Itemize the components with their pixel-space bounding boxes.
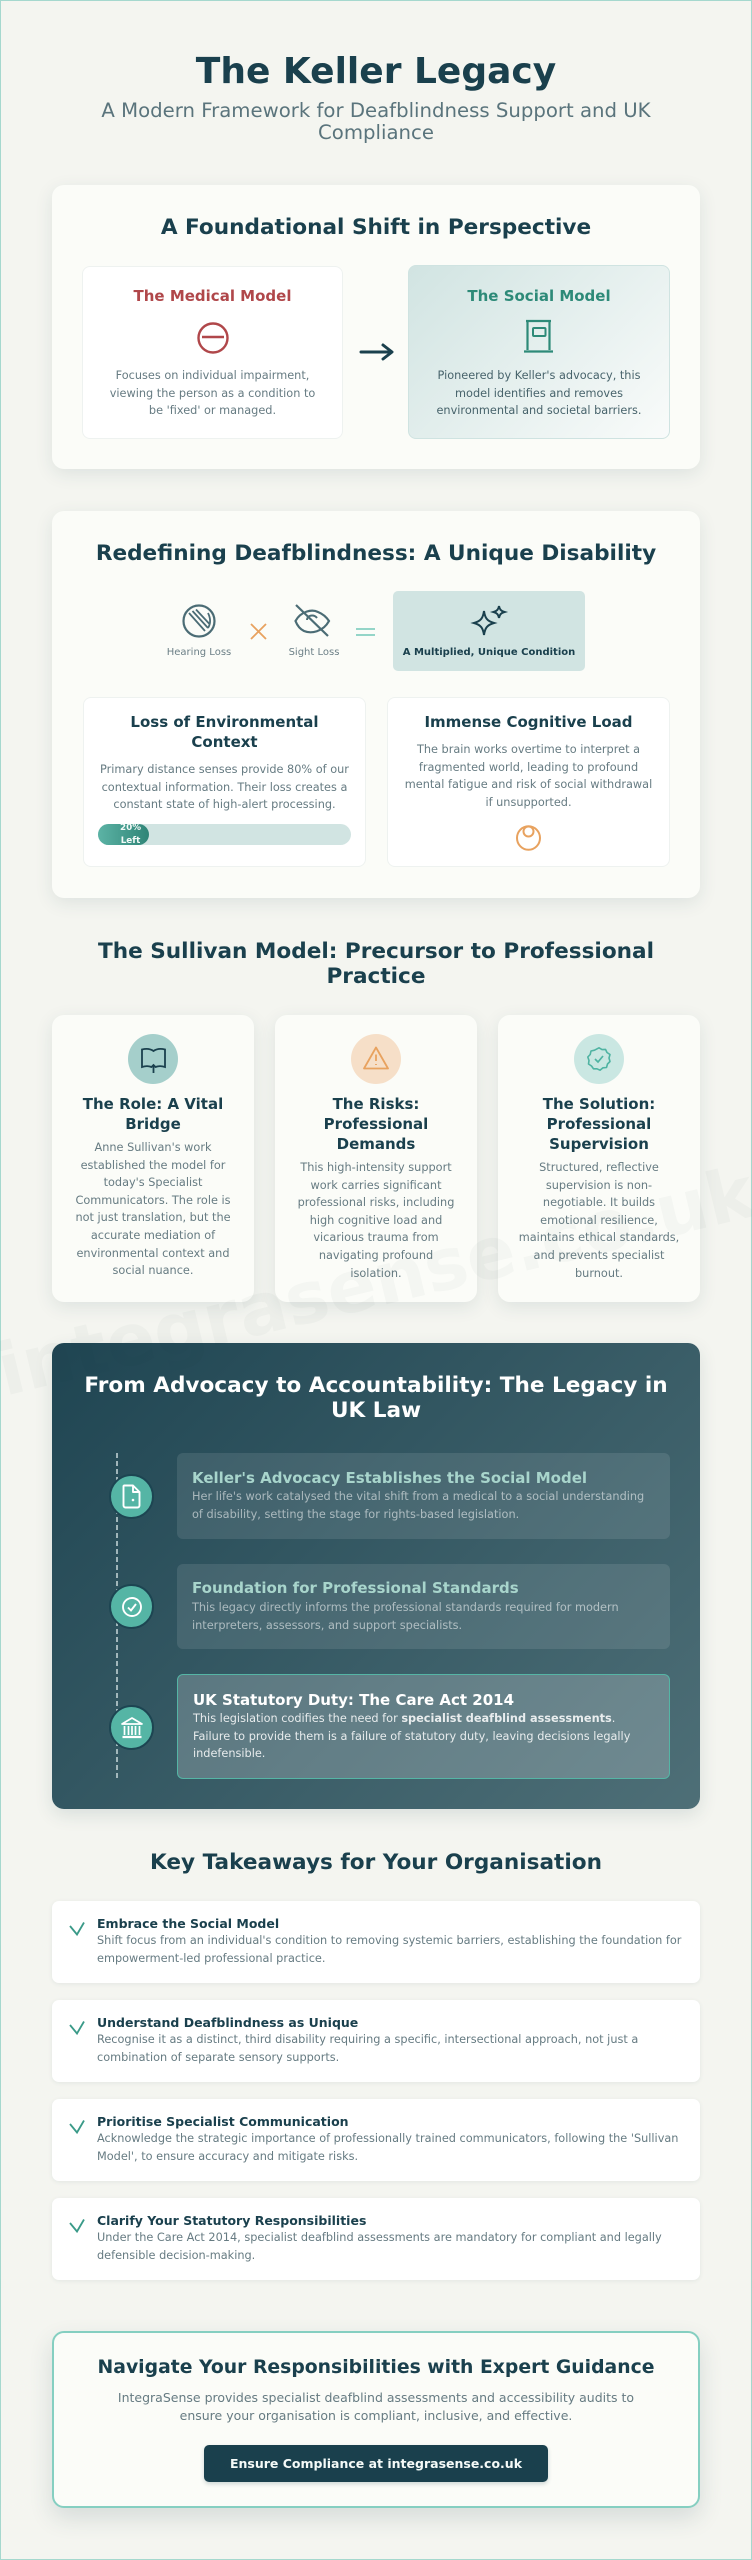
card heading — [324, 1095, 428, 1153]
icon: institution — [109, 1705, 154, 1750]
takeaway title: Prioritise Specialist Communication — [97, 2114, 349, 2129]
label: hearing loss: Hearing Loss — [167, 647, 231, 658]
panel: the solution — [498, 1015, 700, 1302]
icon: book — [128, 1034, 178, 1084]
takeaway text: combination of separate sensory supports. — [97, 2051, 339, 2064]
card: loss of environmental context — [83, 697, 366, 867]
card heading: Immense Cognitive Load — [424, 712, 633, 730]
panel: the role — [52, 1015, 254, 1302]
card text: vicarious trauma from — [313, 1231, 439, 1244]
step text: interpreters, assessors, and support specialists. — [192, 1619, 462, 1632]
icon: arrow — [360, 343, 394, 361]
cta text: IntegraSense provides specialist deafblind assessments and accessibility audits to — [118, 2390, 634, 2405]
heading: Redefining Deafblindness: A Unique Disability — [96, 540, 656, 566]
takeaway text — [97, 1934, 682, 1965]
heading — [84, 1372, 668, 1422]
card heading — [82, 1095, 223, 1133]
subtitle — [101, 98, 651, 144]
takeaway text — [97, 2229, 662, 2264]
card text — [100, 763, 349, 811]
takeaway text — [97, 2132, 678, 2163]
takeaway text — [97, 2033, 638, 2064]
cta button: Ensure Compliance at integrasense.co.uk — [230, 2456, 522, 2471]
card text: work carries significant — [310, 1179, 442, 1192]
medical model text: viewing the person as a condition to — [110, 387, 315, 400]
card text: if unsupported. — [485, 796, 572, 809]
takeaway 3 — [52, 2099, 700, 2181]
step text: Her life's work catalysed the vital shift from a medical to a social understanding — [192, 1490, 644, 1503]
card text: environmental context and — [76, 1247, 230, 1260]
card text: negotiable. It builds — [543, 1196, 655, 1209]
card heading: Professional — [547, 1115, 651, 1133]
icon: equals — [356, 628, 375, 636]
card text: professional risks, including — [298, 1196, 454, 1209]
icon: check — [69, 1922, 85, 1936]
step text: This legacy directly informs the professional standards required for modern — [192, 1601, 619, 1614]
takeaway text: Shift focus from an individual's condition to removing systemic barriers, establishing the foundation for — [97, 1934, 681, 1947]
social model text: environmental and societal barriers. — [436, 404, 642, 417]
timeline step 2 — [109, 1564, 670, 1649]
cta text — [54, 2389, 698, 2424]
takeaway 4 — [52, 2198, 700, 2280]
cta heading: Navigate Your Responsibilities with Expert Guidance — [98, 2357, 654, 2378]
icon: multiply — [250, 623, 267, 640]
card text: established the model for — [81, 1159, 225, 1172]
step text: This legislation codifies the need for specialist deafblind assessments. — [193, 1712, 615, 1725]
takeaway 1 — [52, 1901, 700, 1983]
heading: the sullivan model — [98, 938, 654, 988]
watermark: integrasense.co.uk — [0, 1150, 752, 1412]
card text: isolation. — [350, 1267, 402, 1280]
card text — [75, 1141, 231, 1277]
card: immense cognitive load — [387, 697, 670, 867]
card text — [298, 1161, 454, 1280]
takeaway text: empowerment-led professional practice. — [97, 1952, 325, 1965]
card text: emotional resilience, — [540, 1214, 658, 1227]
social model title: The Social Model — [467, 287, 611, 305]
takeaway text: Acknowledge the strategic importance of professionally trained communicators, following the 'Sullivan — [97, 2132, 678, 2145]
social model text — [436, 369, 642, 417]
icon: open door — [524, 320, 553, 353]
social model text: Pioneered by Keller's advocacy, this — [438, 369, 640, 382]
card text: maintains ethical standards, — [519, 1231, 679, 1244]
takeaway 2 — [52, 2000, 700, 2082]
panel: the risks — [275, 1015, 477, 1302]
card heading: The Solution: — [543, 1095, 655, 1113]
card: social model — [408, 265, 670, 439]
medical model text — [110, 369, 315, 417]
card heading: Supervision — [549, 1135, 649, 1153]
icon: no entry — [197, 322, 229, 354]
card text: contextual information. Their loss creates a — [102, 781, 347, 794]
medical model title: The Medical Model — [134, 287, 291, 305]
icon: check circle — [109, 1584, 154, 1629]
step box — [177, 1453, 670, 1539]
subtitle: Compliance — [318, 121, 434, 144]
step box — [177, 1564, 670, 1649]
result label: A Multiplied, Unique Condition — [403, 647, 575, 658]
step text — [192, 1601, 619, 1632]
step title: UK Statutory Duty: The Care Act 2014 — [193, 1691, 514, 1709]
takeaway text: Under the Care Act 2014, specialist deafblind assessments are mandatory for compliant and legally — [97, 2231, 662, 2244]
card text — [405, 743, 652, 809]
card text: Primary distance senses provide 80% of our — [100, 763, 349, 776]
card text: The brain works overtime to interpret a — [417, 743, 640, 756]
timeline step 3 — [109, 1674, 670, 1779]
panel: redefining deafblindness — [52, 511, 700, 898]
heading: A Foundational Shift in Perspective — [161, 214, 591, 240]
step text — [192, 1490, 644, 1521]
icon: hearing loss — [182, 604, 216, 638]
heading: From Advocacy to Accountability: The Legacy in — [84, 1372, 668, 1398]
icon: sight loss — [294, 604, 330, 637]
heading: UK Law — [331, 1398, 421, 1422]
takeaway title: Embrace the Social Model — [97, 1916, 279, 1931]
panel: a foundational shift — [52, 185, 700, 469]
medical model text: be 'fixed' or managed. — [149, 404, 276, 417]
card text: constant state of high-alert processing. — [113, 798, 336, 811]
cta text: ensure your organisation is compliant, inclusive, and effective. — [180, 2408, 572, 2423]
timeline line — [116, 1453, 118, 1778]
icon: warning — [351, 1034, 401, 1084]
icon: brain — [516, 825, 541, 851]
medical model text: Focuses on individual impairment, — [116, 369, 309, 382]
card heading: The Risks: — [333, 1095, 419, 1113]
equation diagram — [167, 591, 585, 671]
title: The Keller Legacy — [196, 50, 556, 92]
heading: the sullivan model: Practice — [326, 964, 426, 988]
step text: indefensible. — [193, 1747, 265, 1760]
header — [101, 50, 651, 144]
takeaway text: defensible decision-making. — [97, 2249, 255, 2262]
timeline step 1 — [109, 1453, 670, 1539]
card heading: Demands — [337, 1135, 415, 1153]
progress label — [120, 823, 141, 846]
result box — [393, 591, 585, 671]
card text: not just translation, but the — [75, 1211, 231, 1224]
heading: the sullivan model: The Sullivan Model: Precursor to Professional — [98, 938, 654, 964]
progress bar: 20% left — [98, 824, 351, 845]
step title: Keller's Advocacy Establishes the Social Model — [192, 1469, 587, 1487]
card heading: Loss of Environmental — [130, 712, 319, 730]
cta button — [204, 2445, 548, 2482]
takeaway title: Clarify Your Statutory Responsibilities — [97, 2213, 366, 2228]
card: medical model — [82, 266, 343, 439]
card heading: Bridge — [125, 1115, 181, 1133]
icon: badge check — [574, 1034, 624, 1084]
card text: social nuance. — [113, 1264, 193, 1277]
progress label: 20% — [120, 823, 141, 833]
card text: fragmented world, leading to profound — [419, 761, 638, 774]
step box — [177, 1674, 670, 1779]
card heading — [130, 712, 319, 750]
step title: Foundation for Professional Standards — [192, 1579, 519, 1597]
takeaway text: Model', to ensure accuracy and mitigate risks. — [97, 2150, 358, 2163]
step text: Failure to provide them is a failure of statutory duty, leaving decisions legally — [193, 1730, 630, 1743]
panel: call to action — [52, 2331, 700, 2508]
card text: Structured, reflective — [539, 1161, 659, 1174]
timeline — [116, 1453, 118, 1778]
social model text: model identifies and removes — [455, 387, 623, 400]
card text: and prevents specialist — [534, 1249, 664, 1262]
icon: document — [109, 1474, 154, 1519]
card text: Anne Sullivan's work — [94, 1141, 212, 1154]
card text — [519, 1161, 679, 1280]
card heading: The Role: A Vital — [83, 1095, 223, 1113]
card heading: Context — [191, 732, 258, 750]
subtitle: A Modern Framework for Deafblindness Support and UK — [101, 98, 651, 122]
card text: navigating profound — [319, 1249, 433, 1262]
card text: supervision is non- — [546, 1179, 652, 1192]
heading: key takeaways: Key Takeaways for Your Organisation — [150, 1850, 602, 1874]
card text: burnout. — [575, 1267, 623, 1280]
panel: from advocacy to accountability — [52, 1343, 700, 1809]
card text: today's Specialist — [104, 1176, 202, 1189]
card text: mental fatigue and risk of social withdrawal — [405, 778, 652, 791]
icon: sparkles — [470, 606, 508, 636]
takeaway text: Recognise it as a distinct, third disability requiring a specific, intersectional approach, not just a — [97, 2033, 638, 2046]
card heading: Professional — [324, 1115, 428, 1133]
progress label: Left — [121, 836, 140, 846]
card text: Communicators. The role is — [75, 1194, 231, 1207]
card text: This high-intensity support — [300, 1161, 452, 1174]
card heading — [542, 1095, 655, 1153]
icon: check — [69, 2219, 85, 2232]
icon: check — [69, 2021, 85, 2035]
step text — [192, 1712, 630, 1760]
takeaway title: Understand Deafblindness as Unique — [97, 2015, 358, 2030]
label: sight loss: Sight Loss — [289, 647, 339, 658]
icon: check — [69, 2120, 85, 2134]
card text: high cognitive load and — [310, 1214, 442, 1227]
step text: of disability, setting the stage for rights-based legislation. — [192, 1508, 519, 1521]
card text: accurate mediation of — [91, 1229, 215, 1242]
